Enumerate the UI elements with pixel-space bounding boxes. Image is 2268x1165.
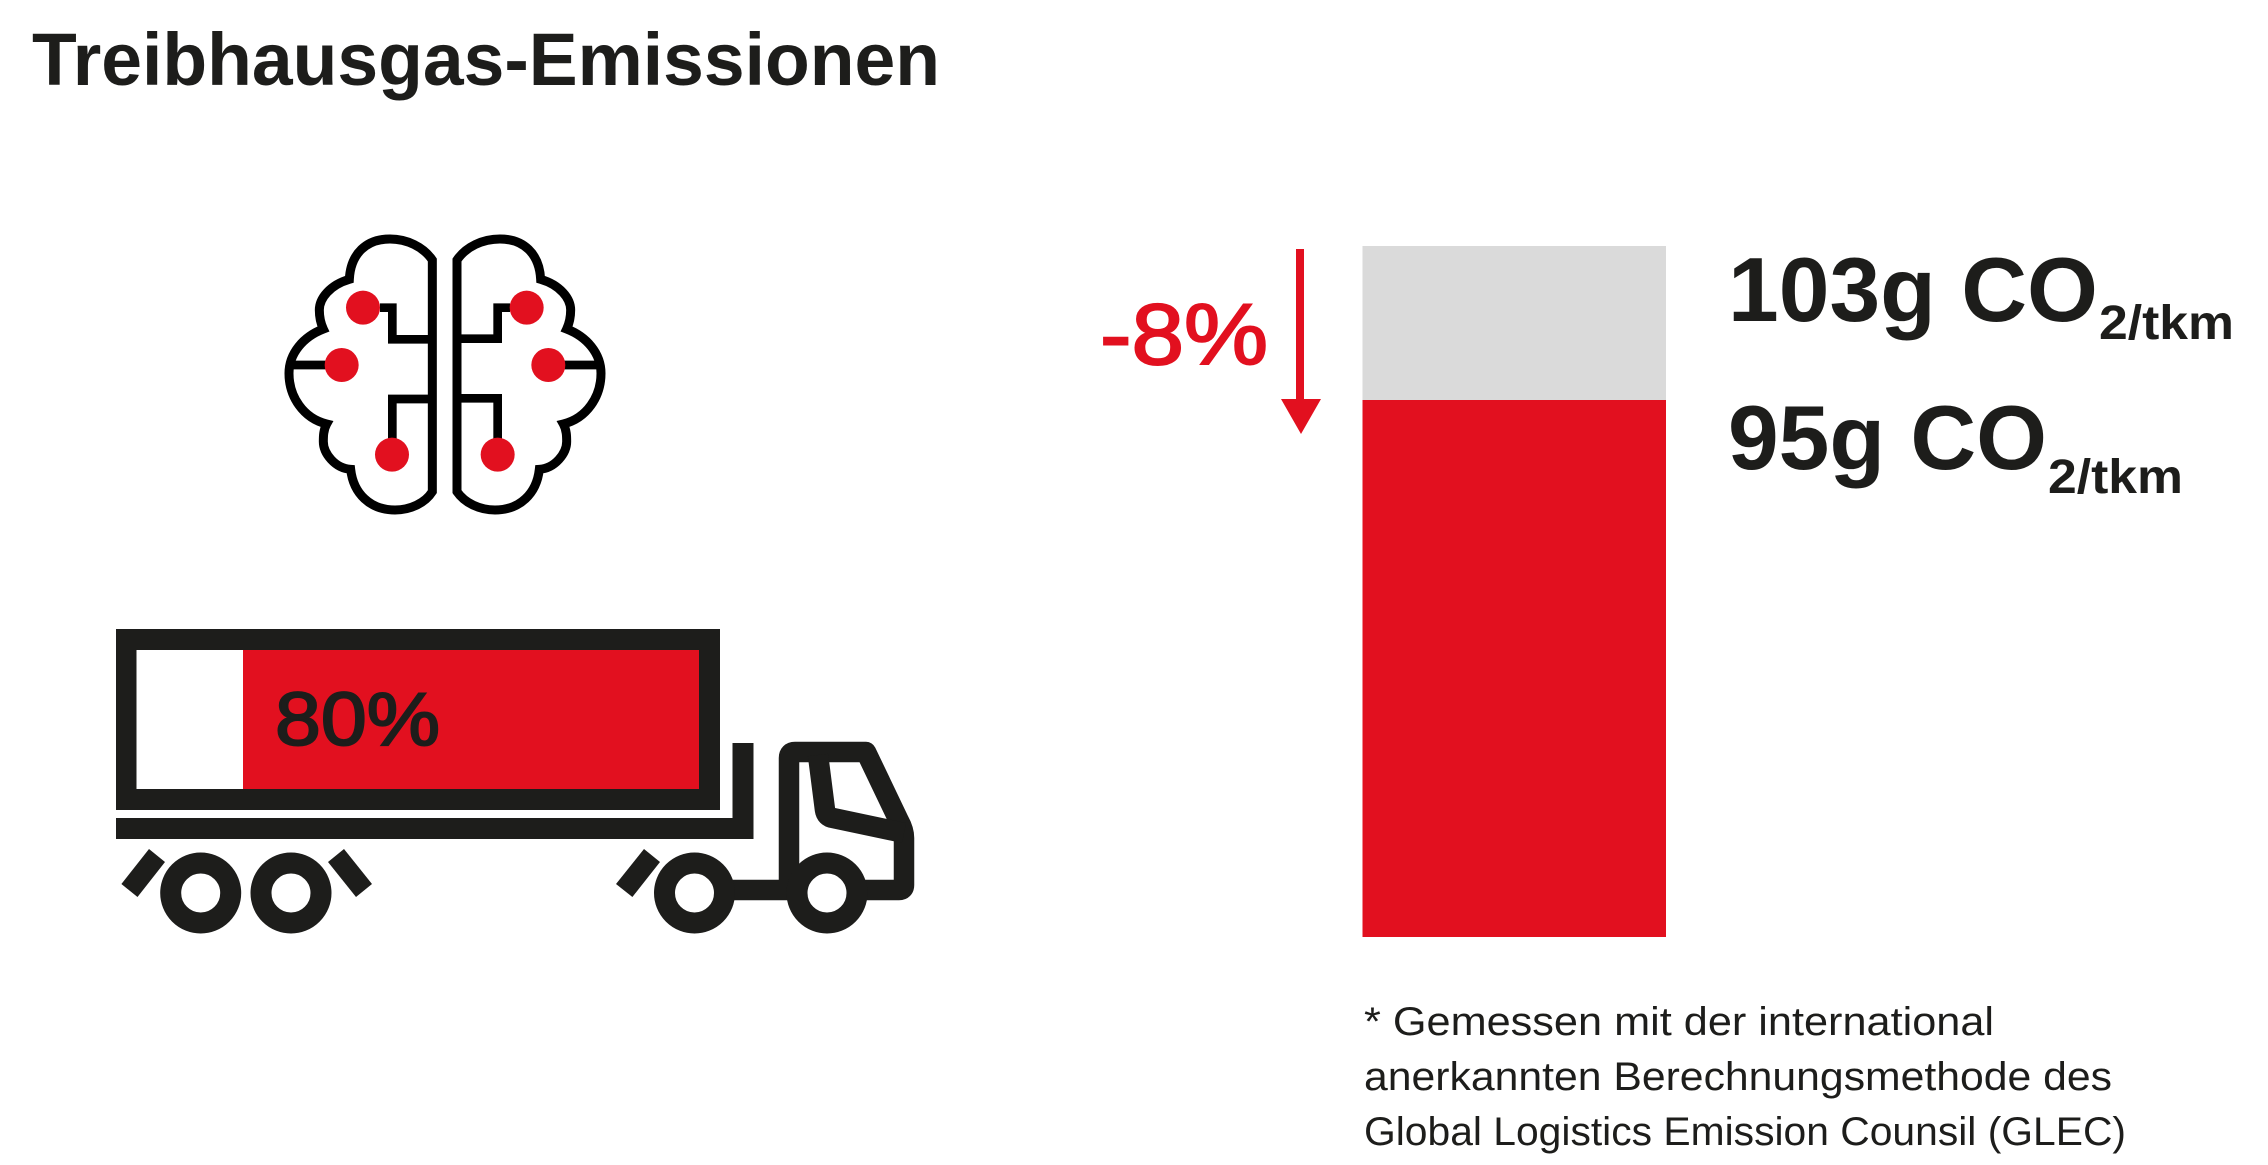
brain right hemisphere outline [457, 239, 601, 510]
icon: brain with circuit nodes [289, 239, 601, 510]
value label: 103g [1728, 240, 2234, 350]
container red load fill [243, 650, 699, 789]
footnote [1364, 1000, 2126, 1154]
footnote: * Gemessen mit der international [1364, 1000, 1994, 1044]
footnote: anerkannten Berechnungsmethode des [1364, 1055, 2112, 1099]
bar: previous value [1362, 246, 1666, 401]
circuit lines [293, 308, 597, 440]
bar chart: CO2 per tkm [1362, 246, 1666, 937]
wheels [171, 863, 857, 923]
change arrow and label [1100, 249, 1321, 434]
container empty part [136, 650, 244, 789]
load label: 80% [275, 677, 440, 761]
footnote: Global Logistics Emission Counsil (GLEC) [1364, 1110, 2126, 1154]
red circuit nodes [325, 291, 565, 472]
brain left hemisphere outline [289, 239, 432, 510]
mudguards [121, 849, 660, 897]
value label: 103g: 2/tkm [2099, 297, 2234, 350]
arrow: down [1281, 249, 1321, 434]
value label: 95g: 95g CO [1728, 388, 2047, 489]
reduction label: -8% [1100, 287, 1268, 383]
icon: truck with 80% load [116, 629, 904, 923]
truck bed [116, 743, 754, 839]
value label: 95g: 2/tkm [2048, 451, 2183, 504]
value label: 95g [1728, 388, 2183, 504]
bar: current value [1362, 400, 1666, 937]
truck cab [732, 752, 904, 890]
value label: 103g: 103g CO [1728, 240, 2098, 341]
title: Treibhausgas-Emissionen [32, 18, 940, 101]
truck container frame [116, 629, 720, 810]
